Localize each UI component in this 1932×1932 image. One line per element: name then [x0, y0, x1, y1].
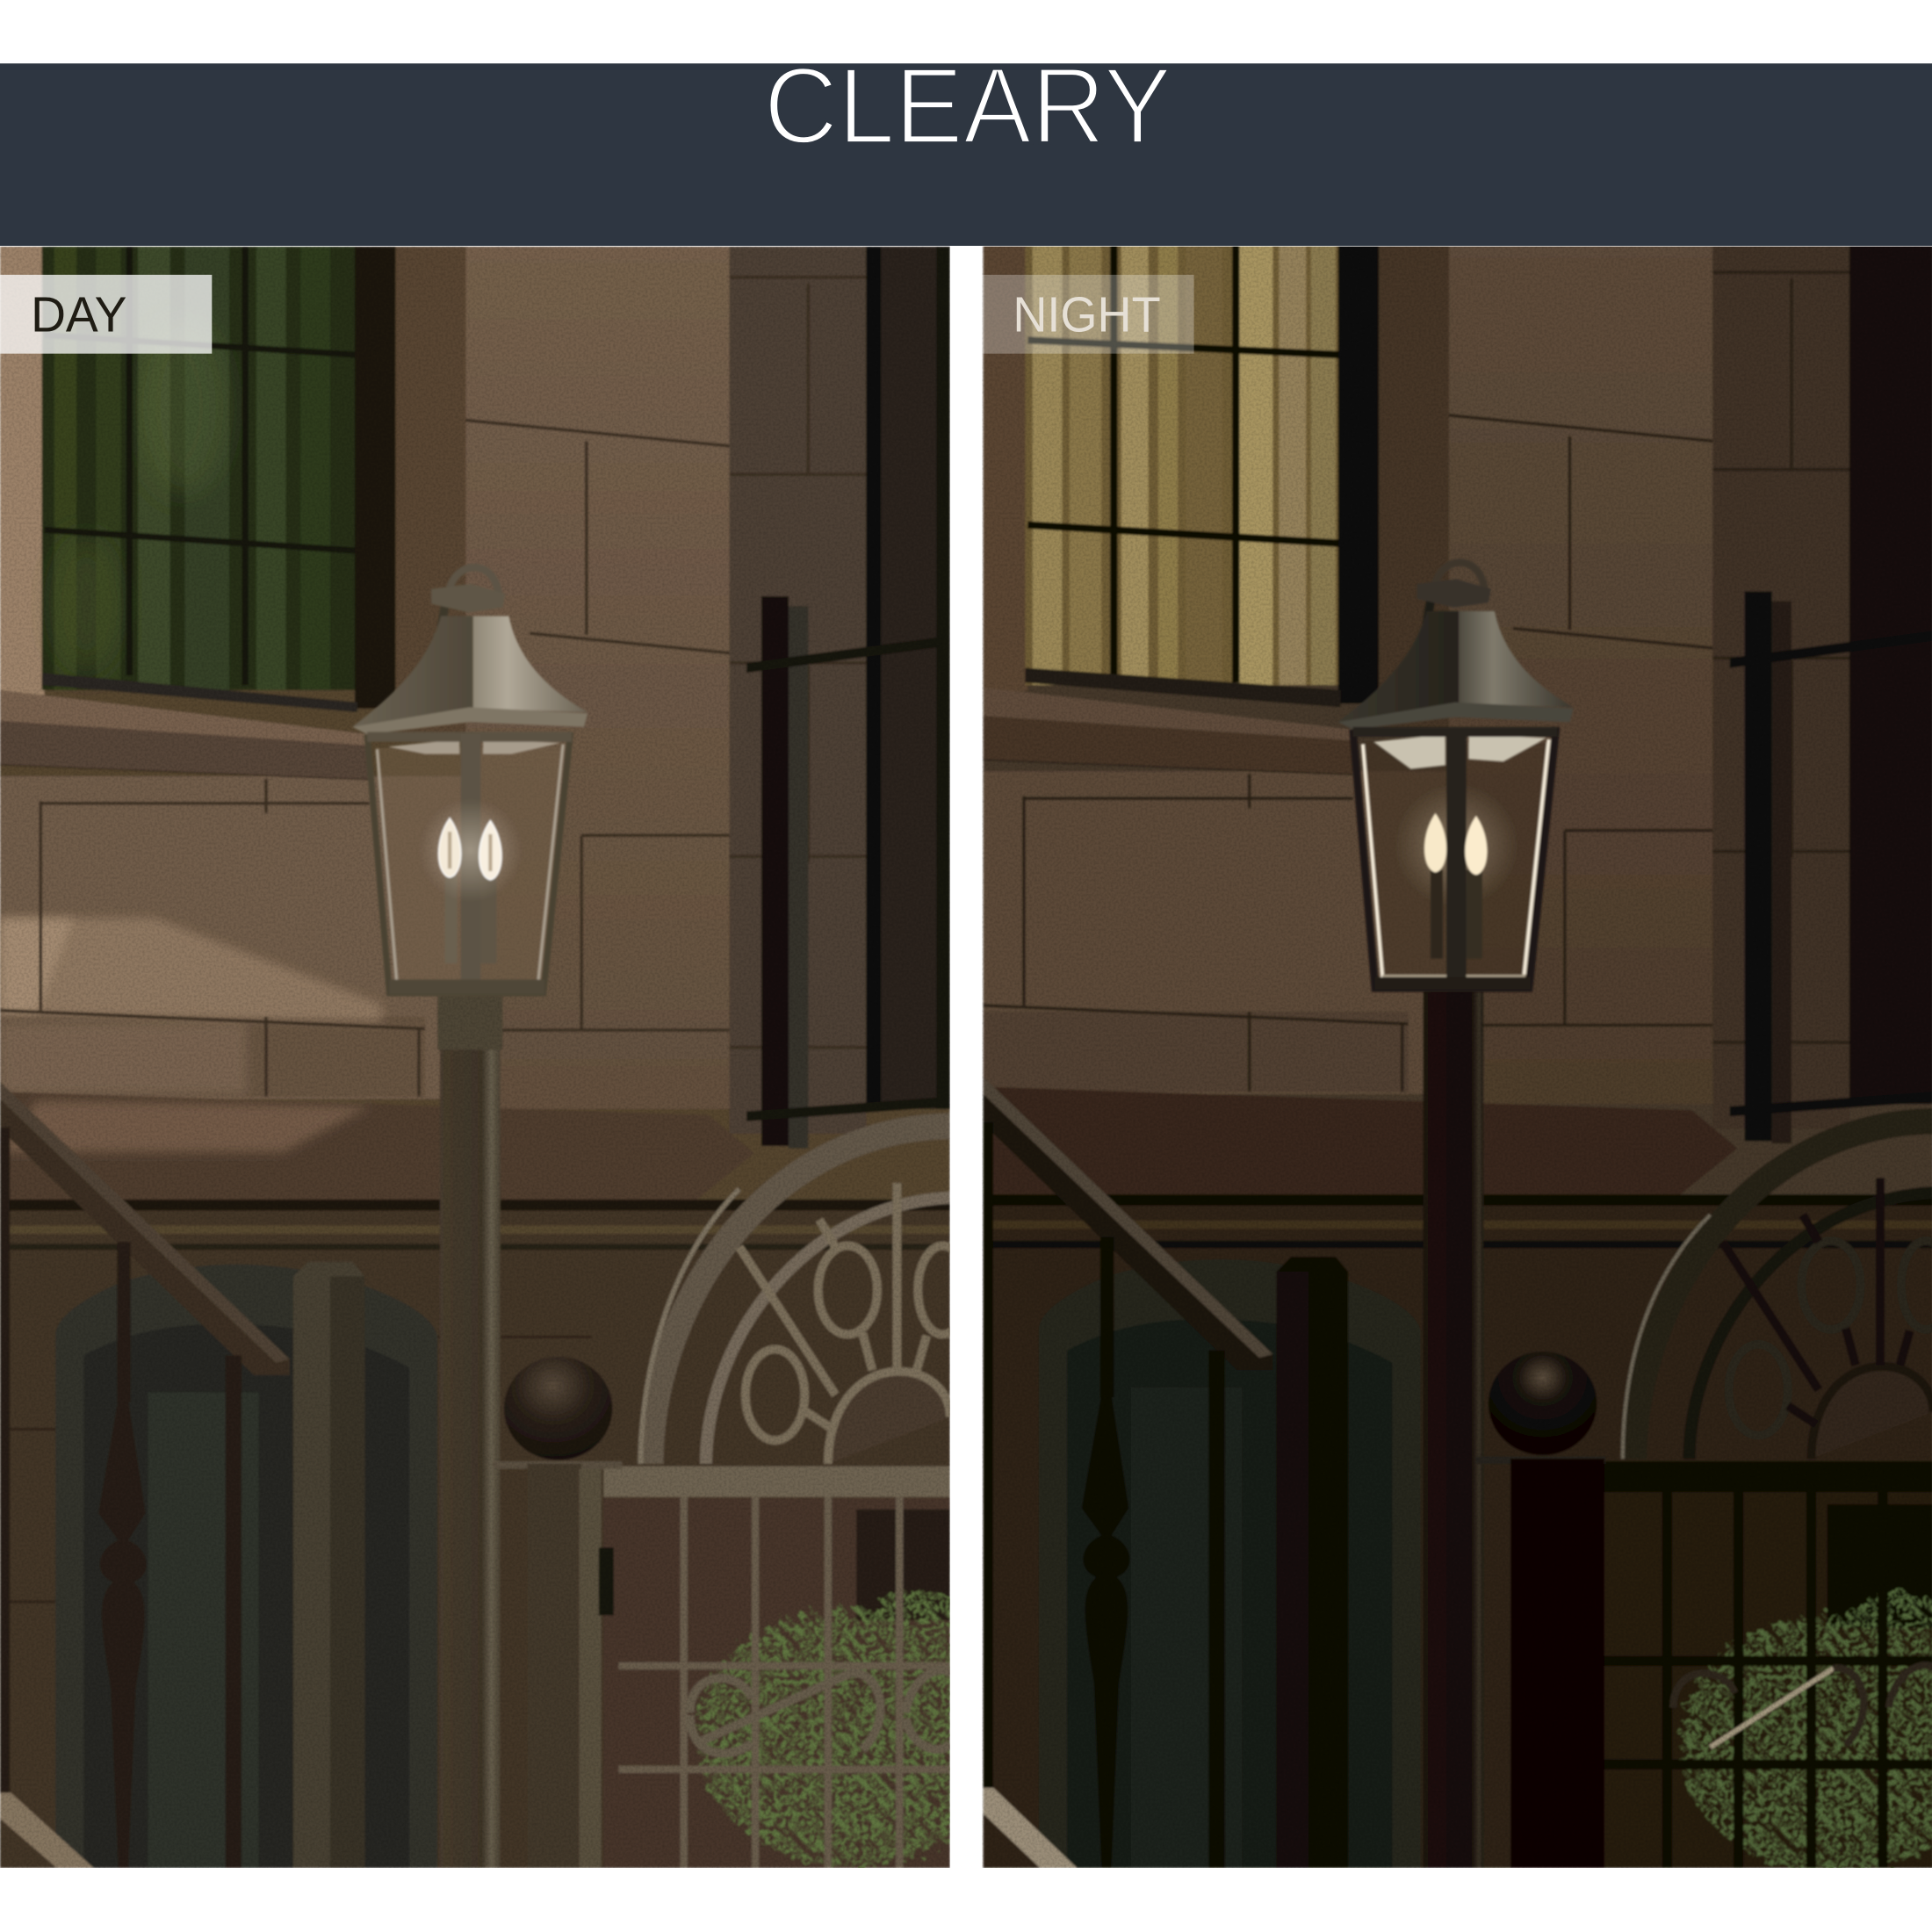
night bulbs	[1424, 813, 1446, 872]
night lantern glass	[1361, 743, 1550, 977]
night newel post	[1277, 1257, 1348, 1868]
night gate	[1476, 1121, 1932, 1874]
night foliage	[1679, 1590, 1932, 1874]
night balusters	[984, 1122, 1225, 1868]
day gate	[493, 1126, 1004, 1868]
day label	[0, 275, 212, 354]
day balusters	[0, 1128, 242, 1868]
night stone grain	[984, 242, 1932, 1868]
day lamp pole	[440, 996, 501, 1868]
day candles	[445, 875, 458, 963]
day stone grain	[0, 247, 950, 1868]
day lantern frame	[377, 744, 563, 982]
day lantern glass	[376, 748, 565, 982]
night lantern frame	[1353, 727, 1556, 988]
night lantern roof	[1338, 611, 1459, 722]
night label: NIGHT	[1013, 286, 1161, 342]
night wall	[984, 242, 1932, 1874]
panel: day photo	[0, 247, 1004, 1868]
day stair rail	[0, 1082, 290, 1375]
day bulbs	[438, 818, 461, 877]
day label: DAY	[31, 286, 127, 342]
night scene	[984, 242, 1932, 1874]
day window sill	[0, 690, 365, 746]
night right column	[1849, 242, 1932, 1104]
day lower wall	[0, 1201, 950, 1868]
day lantern handle	[449, 567, 499, 596]
night lantern handle	[1434, 562, 1485, 591]
night lower wall	[984, 1196, 1932, 1868]
day foliage	[696, 1590, 1004, 1867]
night candles	[1431, 870, 1443, 959]
day lantern	[352, 567, 588, 994]
panel: night photo	[982, 242, 1932, 1874]
night window sill	[984, 688, 1353, 774]
night stair rail	[984, 1077, 1272, 1370]
day glow	[419, 798, 523, 902]
day right column	[866, 247, 950, 1109]
day lantern roof	[352, 616, 473, 727]
day wall	[0, 247, 1004, 1868]
night ledge	[984, 1087, 1737, 1200]
night arched door	[1039, 1259, 1421, 1868]
day window	[0, 247, 395, 712]
day ball finial	[504, 1357, 612, 1460]
title: CLEARY	[764, 46, 1171, 167]
night lamp pole	[1424, 991, 1483, 1868]
day back fence	[761, 596, 789, 1146]
night ball finial	[1489, 1352, 1597, 1455]
night window	[984, 242, 1379, 707]
night lantern	[1338, 562, 1574, 990]
night back fence	[1745, 591, 1772, 1141]
day arched door	[55, 1265, 437, 1868]
day ledge	[11, 1092, 508, 1110]
night label	[982, 275, 1194, 354]
header band	[0, 63, 1932, 246]
day newel post	[293, 1262, 364, 1868]
